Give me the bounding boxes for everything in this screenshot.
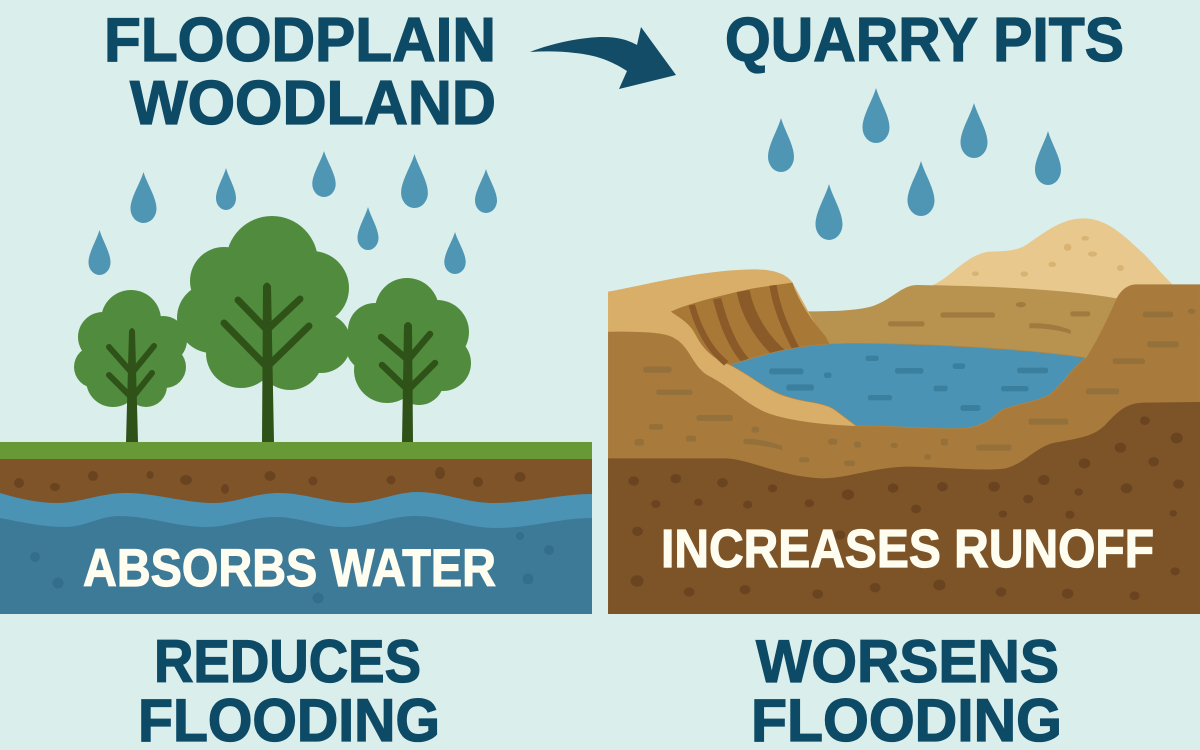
- title: floodplain woodland: [104, 6, 496, 138]
- sand pit lining: [608, 269, 856, 426]
- label: absorbs water: ABSORBS WATER: [83, 539, 496, 598]
- outcome: worsens flooding: WORSENS: [756, 628, 1059, 695]
- arrow: from woodland to quarry: [530, 27, 676, 89]
- title: quarry pits: QUARRY PITS: [725, 6, 1124, 75]
- icon: left tree: [74, 290, 187, 442]
- title: floodplain woodland: WOODLAND: [130, 69, 496, 138]
- panel: floodplain woodland: [0, 151, 592, 614]
- sand pile: [933, 218, 1172, 307]
- label: increases runoff: INCREASES RUNOFF: [661, 519, 1154, 579]
- dark subsoil layer: [608, 402, 1200, 614]
- title: floodplain woodland: FLOODPLAIN: [104, 6, 496, 75]
- outcome: reduces flooding: REDUCES: [154, 628, 421, 695]
- outcome: worsens flooding: [751, 628, 1062, 750]
- water: light upper band: [0, 492, 592, 530]
- mid soil layer: [608, 284, 1200, 487]
- ground: soil layer: [0, 459, 592, 509]
- panel: quarry pits: [608, 88, 1200, 614]
- icon: middle tree: [177, 216, 351, 442]
- outcome: reduces flooding: [138, 628, 440, 750]
- ground: grass strip: [0, 442, 592, 459]
- quarry pit water: [730, 343, 1086, 429]
- rain drops: quarry: [768, 88, 1061, 240]
- quarry landscape: [608, 218, 1200, 614]
- exposed rock face: [671, 283, 832, 365]
- rain drops: woodland: [88, 151, 497, 275]
- back quarry bank: [803, 285, 1117, 360]
- icon: right tree: [346, 278, 471, 442]
- water: absorbed deep band: [0, 516, 592, 614]
